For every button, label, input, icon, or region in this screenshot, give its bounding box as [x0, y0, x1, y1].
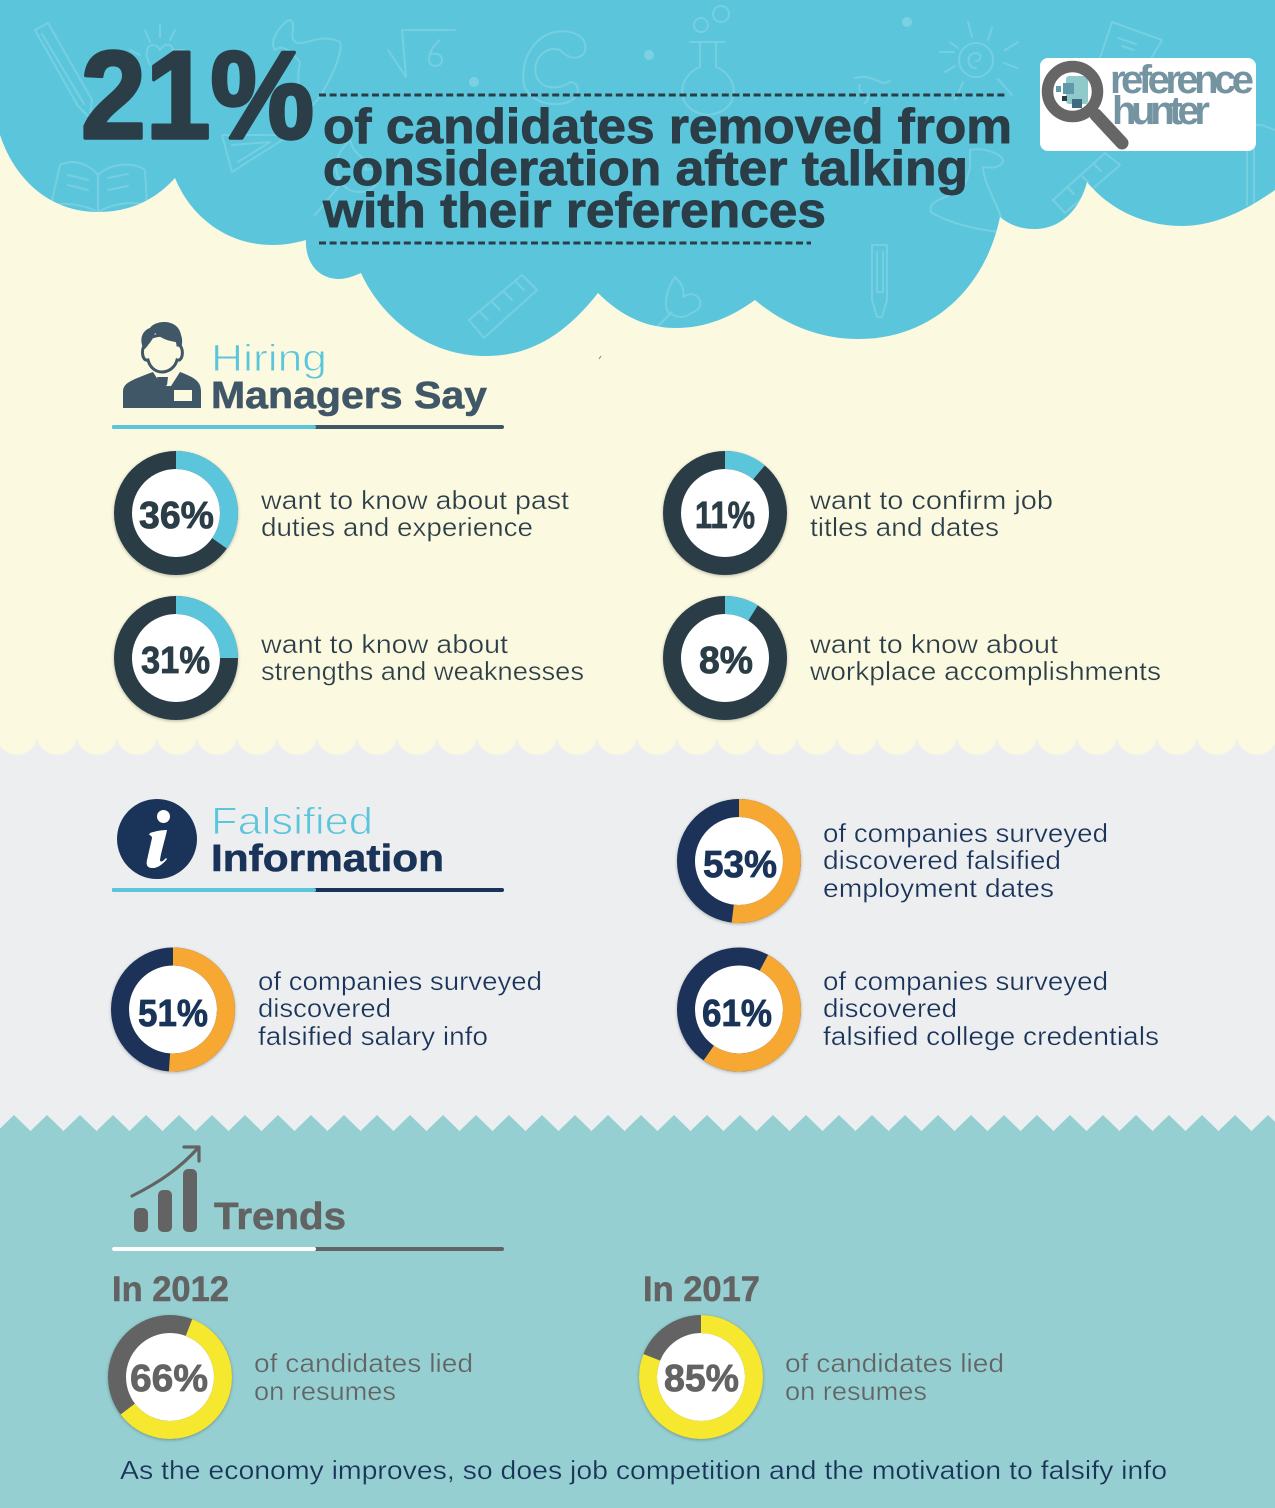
- tiny mark: [599, 356, 601, 359]
- background doodles: [35, 6, 1275, 338]
- heading: hiring managers say: [211, 338, 487, 417]
- stat: 36%: duties and experience: [261, 512, 533, 542]
- stat: 8%: 8%: [699, 640, 753, 682]
- header cloud: [0, 0, 1275, 356]
- stat: 53%: discovered falsified: [823, 845, 1061, 875]
- stat: 85%: of candidates lied: [785, 1348, 1004, 1378]
- heading: trends: Trends: [214, 1196, 346, 1238]
- stat: 31%: [123, 605, 584, 711]
- stat: 31%: want to know about: [260, 629, 509, 659]
- icon: information: [117, 799, 197, 879]
- stat: 51%: discovered: [258, 993, 391, 1023]
- stat: 66%: on resumes: [254, 1376, 396, 1406]
- stat: 61%: [667, 938, 1159, 1081]
- stat: 51%: of companies surveyed: [258, 966, 542, 996]
- stat: 11%: 11%: [695, 495, 755, 537]
- label: in 2017: In 2017: [643, 1270, 760, 1309]
- heading: hiring managers say: Hiring: [211, 338, 327, 380]
- panel: cream hiring managers background with scalloped edge: [0, 0, 1275, 755]
- headline dashed rules: [319, 95, 1007, 243]
- stat: 66%: [102, 1309, 473, 1445]
- stat: 11%: [672, 460, 1053, 566]
- stat: 11%: titles and dates: [810, 512, 999, 542]
- stat: 61%: 61%: [702, 993, 772, 1035]
- logo: reference hunter: [1040, 58, 1256, 151]
- stat: 51%: 51%: [138, 993, 208, 1035]
- stat: 85%: on resumes: [785, 1376, 927, 1406]
- stat: 53%: employment dates: [823, 873, 1054, 903]
- headline text: with their references: [322, 184, 826, 238]
- headline text: [322, 100, 1012, 238]
- stat: 36%: want to know about past: [260, 485, 570, 515]
- stat: 85%: 85%: [664, 1358, 739, 1400]
- stat: 61%: discovered: [823, 993, 957, 1023]
- stat: 31%: strengths and weaknesses: [261, 656, 584, 686]
- stat: 53%: of companies surveyed: [823, 818, 1108, 848]
- stat: 53%: 53%: [703, 844, 777, 886]
- heading: falsified information: [211, 801, 444, 880]
- stat: 61%: of companies surveyed: [823, 966, 1108, 996]
- label: in 2012: In 2012: [112, 1270, 229, 1309]
- stat: 36%: 36%: [139, 495, 214, 537]
- heading rule: [112, 425, 504, 429]
- headline text: consideration after talking: [323, 142, 968, 196]
- panel: teal trends background with zigzag edge: [0, 1115, 1275, 1508]
- stat: 8%: workplace accomplishments: [809, 656, 1161, 686]
- heading rule: [112, 1247, 504, 1251]
- stat: 51%: falsified salary info: [258, 1021, 488, 1051]
- icon: trend bars and arrow: [132, 1147, 199, 1232]
- panel: grey falsified information background: [0, 730, 1275, 1130]
- stat: 8%: [672, 605, 1161, 711]
- headline text: of candidates removed from: [323, 100, 1012, 154]
- stat: 61%: falsified college credentials: [823, 1021, 1159, 1051]
- heading: falsified information: Information: [211, 838, 444, 880]
- icon: hiring manager: [123, 322, 201, 408]
- stat: 11%: want to confirm job: [809, 485, 1053, 515]
- headline figure 21%: 21%: [81, 27, 314, 165]
- heading rule: [112, 888, 504, 892]
- stat: 85%: [648, 1324, 1004, 1430]
- stat: 66%: of candidates lied: [254, 1348, 473, 1378]
- stat: 8%: want to know about: [809, 629, 1059, 659]
- stat: 53%: [686, 808, 1108, 914]
- stat: 31%: 31%: [141, 640, 210, 682]
- logo: reference hunter: reference: [1110, 58, 1254, 102]
- stat: 51%: [120, 956, 542, 1062]
- closing statement: As the economy improves, so does job competition and the motivation to falsify info: [120, 1455, 1167, 1485]
- stat: 36%: [123, 460, 570, 566]
- heading: hiring managers say: Managers Say: [211, 375, 487, 417]
- heading: falsified information: Falsified: [211, 801, 373, 843]
- logo: reference hunter: hunter: [1112, 89, 1210, 133]
- stat: 66%: 66%: [130, 1358, 208, 1400]
